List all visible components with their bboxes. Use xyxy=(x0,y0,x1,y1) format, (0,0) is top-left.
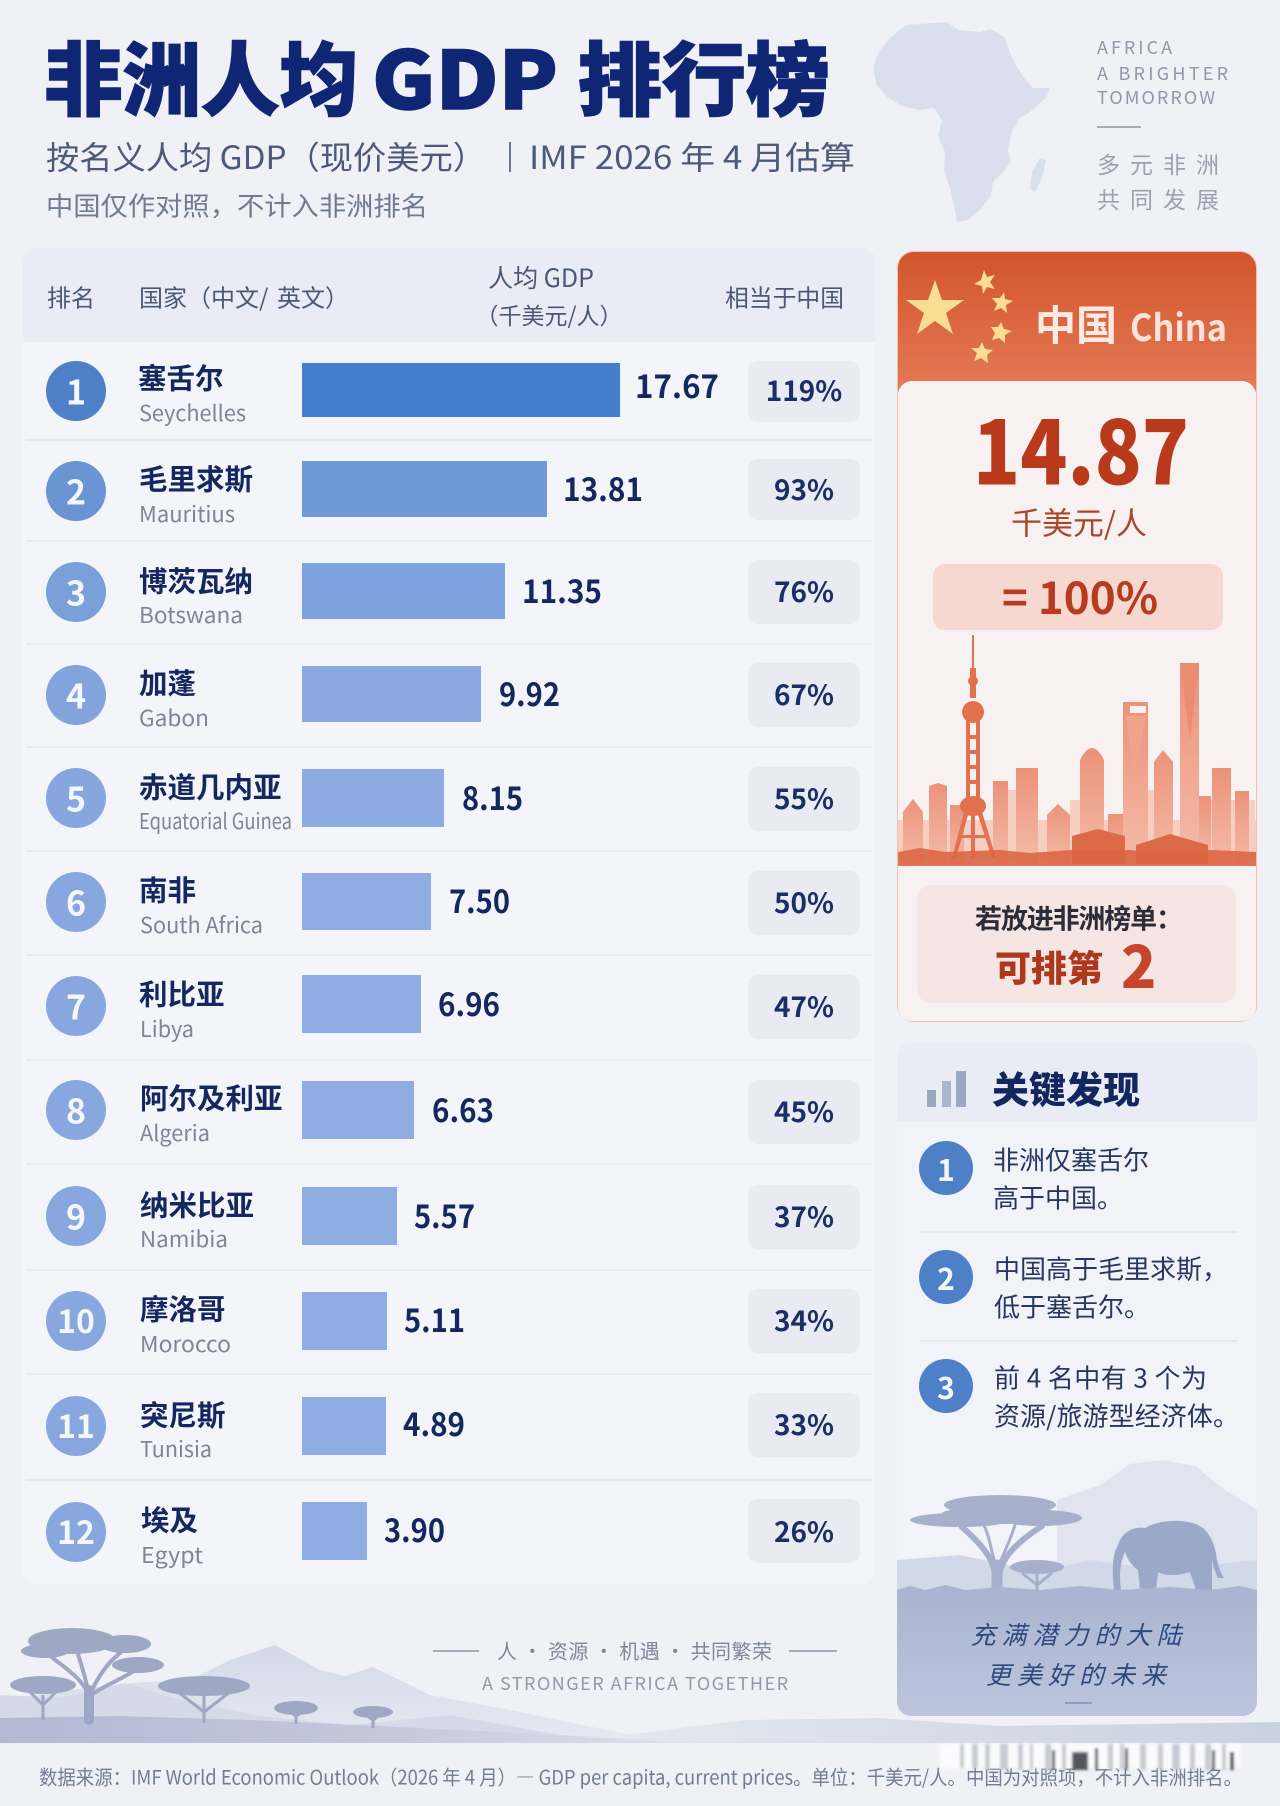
row 7: Libya: 47% xyxy=(774,986,834,1026)
row 5: Equatorial Guinea: 5 xyxy=(66,772,86,822)
row 10: Morocco: 34% xyxy=(774,1300,834,1340)
row 4: Gabon: Gabon xyxy=(139,701,209,733)
callout: rank if included: 2 xyxy=(1121,921,1156,1005)
finding 2: 2 xyxy=(937,1255,955,1299)
title: 非洲人均 xyxy=(44,17,358,133)
slogan: Africa a brighter tomorrow: AFRICA xyxy=(1097,34,1175,60)
callout: rank if included: 可排第 xyxy=(995,940,1103,992)
row 12: Egypt: 26% xyxy=(774,1511,834,1551)
watermark strip xyxy=(940,1744,1240,1770)
row 6: South Africa: 6 xyxy=(66,876,86,926)
Oriental Pearl Tower xyxy=(952,635,996,858)
row 7: Libya: 6.96 xyxy=(438,980,500,1026)
row 1: Seychelles: 塞舌尔 xyxy=(138,356,224,398)
subtitle xyxy=(46,133,855,179)
row 7: Libya: Libya xyxy=(140,1012,194,1044)
slogan: Africa a brighter tomorrow xyxy=(1097,34,1229,215)
title: 排行榜 xyxy=(578,17,830,133)
illustration: Shanghai skyline xyxy=(898,635,1256,866)
row 9: Namibia: 纳米比亚 xyxy=(140,1184,254,1224)
row 1: Seychelles: 1 xyxy=(66,366,86,414)
title xyxy=(44,17,830,133)
finding 1: 高于中国。 xyxy=(993,1178,1123,1216)
subtitle: 按名义人均 GDP（现价美元） xyxy=(46,133,486,179)
footer slogan: A STRONGER AFRICA TOGETHER xyxy=(482,1670,788,1696)
row 2: Mauritius: 13.81 xyxy=(563,465,643,511)
finding 3 xyxy=(919,1358,1239,1434)
row 4: Gabon: 加蓬 xyxy=(139,662,196,702)
slogan: Africa a brighter tomorrow: TOMORROW xyxy=(1097,84,1215,110)
finding 1: 1 xyxy=(937,1146,955,1190)
finding 2: 低于塞舌尔。 xyxy=(994,1288,1150,1324)
slogan: Africa a brighter tomorrow: 共同发展 xyxy=(1097,181,1229,215)
panel: key findings xyxy=(897,1043,1257,1716)
row 1: Seychelles: 17.67 xyxy=(635,362,719,408)
row 10: Morocco: 10 xyxy=(57,1297,95,1343)
row 6: South Africa xyxy=(46,868,860,940)
row 6: South Africa: South Africa xyxy=(140,908,263,940)
badge: = 100% xyxy=(933,563,1223,630)
illustration: footer landscape xyxy=(0,1628,1280,1743)
panel: China card xyxy=(898,252,1256,1021)
elephant xyxy=(1113,1521,1224,1590)
finding 1 xyxy=(919,1140,1149,1216)
row 4: Gabon: 4 xyxy=(66,670,86,718)
row 5: Equatorial Guinea: Equatorial Guinea xyxy=(139,804,292,836)
row 2: Mauritius: 2 xyxy=(66,466,86,514)
row 11: Tunisia: 突尼斯 xyxy=(140,1394,226,1434)
row 4: Gabon xyxy=(46,662,860,733)
row 9: Namibia: 5.57 xyxy=(414,1192,475,1238)
finding 3: 3 xyxy=(937,1364,955,1408)
illustration: savanna with elephant xyxy=(897,1460,1257,1716)
row 2: Mauritius: Mauritius xyxy=(139,497,235,529)
row 11: Tunisia xyxy=(46,1393,860,1464)
row 12: Egypt: 埃及 xyxy=(141,1498,198,1540)
row 2: Mauritius xyxy=(46,458,860,529)
row 8: Algeria: 8 xyxy=(66,1084,86,1134)
table header row: / xyxy=(259,278,269,314)
row 9: Namibia: Namibia xyxy=(140,1222,228,1254)
row 12: Egypt xyxy=(46,1498,860,1570)
finding 3: 前 4 名中有 3 个为 xyxy=(994,1358,1207,1396)
heading: China: 中国 xyxy=(1035,292,1117,352)
table header row: （千美元/人） xyxy=(475,297,623,331)
table header row: 英文） xyxy=(277,278,349,314)
row 11: Tunisia: Tunisia xyxy=(140,1432,212,1464)
row 8: Algeria: 6.63 xyxy=(432,1086,494,1132)
badge: = 100%: = 100% xyxy=(1002,563,1158,627)
row 3: Botswana: 博茨瓦纳 xyxy=(139,560,253,600)
row 12: Egypt: 12 xyxy=(57,1508,95,1554)
row 7: Libya xyxy=(46,972,860,1044)
finding 3: 资源/旅游型经济体。 xyxy=(994,1396,1239,1434)
slogan: continent of potential: 更美好的未来 xyxy=(986,1656,1172,1692)
acacia tree xyxy=(910,1495,1082,1590)
table header row: 相当于中国 xyxy=(725,278,844,314)
subtitle: IMF 2026 年 4 月估算 xyxy=(529,133,855,179)
row 6: South Africa: 南非 xyxy=(139,868,196,910)
row 7: Libya: 7 xyxy=(66,980,86,1030)
small acacia trees xyxy=(10,1676,393,1728)
row 9: Namibia xyxy=(46,1184,860,1254)
row 6: South Africa: 7.50 xyxy=(449,877,510,923)
row 3: Botswana xyxy=(46,560,860,630)
large acacia tree xyxy=(21,1628,164,1720)
row 10: Morocco: Morocco xyxy=(140,1327,231,1359)
heading: China: China xyxy=(1130,298,1227,352)
table header row: 排名 xyxy=(47,278,95,314)
finding 1: 非洲仅塞舌尔 xyxy=(993,1140,1149,1178)
title: GDP xyxy=(372,17,558,133)
table header row: 国家（中文 xyxy=(139,278,259,314)
heading: key findings: 关键发现 xyxy=(992,1060,1140,1114)
row 12: Egypt: Egypt xyxy=(141,1538,203,1570)
table header row: 人均 GDP xyxy=(488,259,594,295)
row 7: Libya: 利比亚 xyxy=(139,972,225,1014)
row 3: Botswana: 76% xyxy=(774,571,834,611)
row 3: Botswana: 11.35 xyxy=(522,567,602,613)
row 11: Tunisia: 11 xyxy=(57,1402,95,1448)
slogan: Africa a brighter tomorrow: A BRIGHTER xyxy=(1097,60,1228,86)
row 6: South Africa: 50% xyxy=(774,882,834,922)
row 3: Botswana: 3 xyxy=(66,566,86,616)
row 3: Botswana: Botswana xyxy=(139,598,243,630)
row 5: Equatorial Guinea: 赤道几内亚 xyxy=(139,766,282,806)
row 5: Equatorial Guinea xyxy=(46,766,860,836)
callout: rank if included: 若放进非洲榜单： xyxy=(975,898,1183,936)
slogan: continent of potential xyxy=(970,1616,1188,1704)
footer slogan: 人 · 资源 · 机遇 · 共同繁荣 xyxy=(497,1636,772,1664)
row 8: Algeria xyxy=(46,1076,860,1148)
row 1: Seychelles: Seychelles xyxy=(139,396,246,428)
row 8: Algeria: Algeria xyxy=(140,1116,210,1148)
row 2: Mauritius: 93% xyxy=(774,469,834,509)
row 8: Algeria: 阿尔及利亚 xyxy=(140,1076,283,1118)
row 1: Seychelles xyxy=(46,356,860,428)
footer slogan xyxy=(433,1636,837,1696)
callout: rank if included xyxy=(917,885,1236,1005)
icon: bar chart xyxy=(927,1071,966,1107)
row 11: Tunisia: 33% xyxy=(774,1404,834,1444)
finding 2 xyxy=(919,1250,1228,1324)
slogan: Africa a brighter tomorrow: 多元非洲 xyxy=(1097,146,1229,180)
row 5: Equatorial Guinea: 55% xyxy=(774,778,834,818)
slogan: continent of potential: 充满潜力的大陆 xyxy=(970,1616,1188,1652)
heading: China xyxy=(1035,292,1227,352)
row 1: Seychelles: 119% xyxy=(766,370,842,410)
unit: 千美元/人 xyxy=(1011,498,1147,544)
row 5: Equatorial Guinea: 8.15 xyxy=(462,774,523,820)
row 10: Morocco: 5.11 xyxy=(404,1296,465,1342)
row 9: Namibia: 37% xyxy=(774,1196,834,1236)
icon: five stars xyxy=(906,270,1013,363)
row 8: Algeria: 45% xyxy=(774,1091,834,1131)
finding 2: 中国高于毛里求斯， xyxy=(994,1250,1228,1286)
row 12: Egypt: 3.90 xyxy=(384,1506,445,1552)
big number 14.87: 14.87 xyxy=(973,384,1189,510)
row 2: Mauritius: 毛里求斯 xyxy=(139,458,253,498)
row 10: Morocco: 摩洛哥 xyxy=(140,1288,226,1328)
note: China for reference: 中国仅作对照，不计入非洲排名 xyxy=(46,186,428,224)
row 11: Tunisia: 4.89 xyxy=(403,1400,465,1446)
row 4: Gabon: 9.92 xyxy=(499,670,560,716)
row 10: Morocco xyxy=(46,1288,860,1359)
panel: ranking table xyxy=(23,248,875,1584)
row 4: Gabon: 67% xyxy=(774,674,834,714)
icon: Africa map xyxy=(873,22,1050,222)
table header row xyxy=(47,259,844,331)
row 9: Namibia: 9 xyxy=(66,1190,86,1240)
